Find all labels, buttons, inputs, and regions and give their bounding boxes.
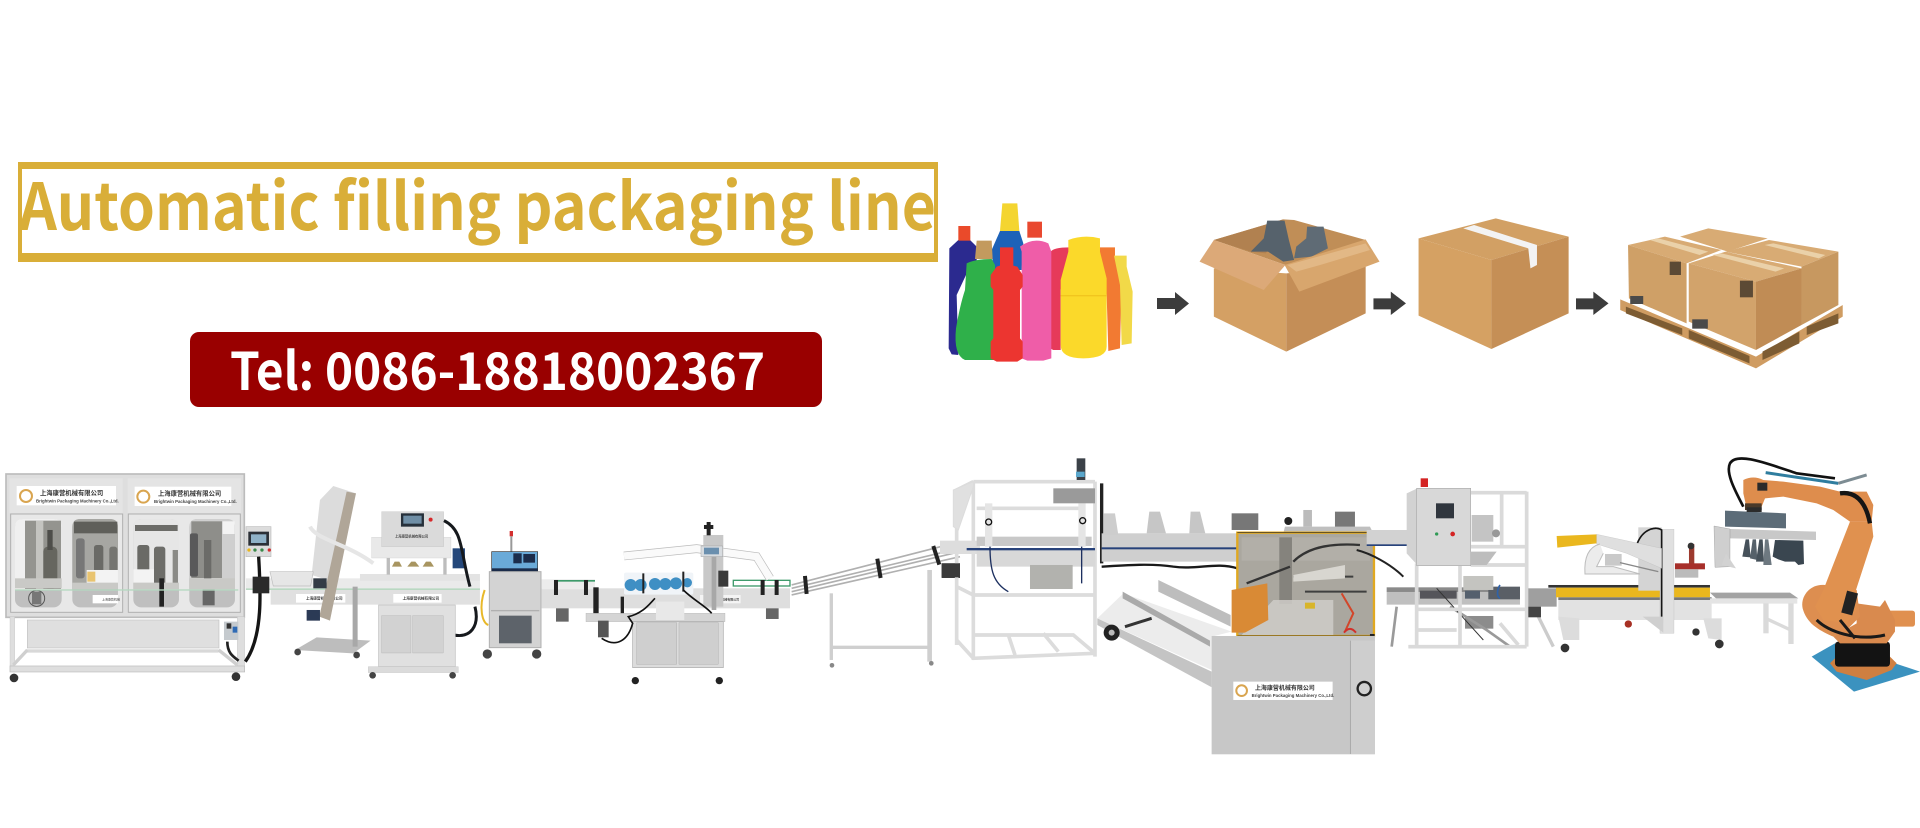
icon: cartons on pallet bbox=[1620, 228, 1843, 368]
logo plate: 上海康营机械有限公司 bbox=[1255, 684, 1315, 692]
arrow bbox=[1157, 292, 1189, 315]
labeling conveyor bbox=[542, 579, 790, 622]
cap elevator bbox=[270, 486, 373, 658]
icon: sealed carton bbox=[1419, 218, 1569, 349]
labeling machine bbox=[586, 522, 770, 684]
filling machine bbox=[6, 474, 271, 682]
induction sealer bbox=[482, 531, 541, 659]
telephone number: Tel: 0086-18818002367 bbox=[230, 330, 765, 405]
logo plate bbox=[17, 486, 119, 505]
orange carton bbox=[1232, 583, 1268, 633]
robot floor mat bbox=[1812, 643, 1920, 692]
carton magazine infeed bbox=[1097, 580, 1232, 687]
door window bbox=[189, 519, 235, 607]
robot pedestal bbox=[1830, 642, 1897, 680]
title text: Automatic filling packaging line bbox=[18, 155, 936, 249]
logo plate: Brightwin Packaging Machinery Co.,Ltd. bbox=[154, 499, 237, 504]
handwheel bbox=[1358, 682, 1371, 695]
bottle turning frame and case erector bbox=[940, 458, 1375, 754]
labeled bottles bbox=[624, 572, 693, 595]
icon: open carton with bottles bbox=[1200, 219, 1380, 352]
logo plate: 上海康营机械有限公司 bbox=[40, 488, 103, 497]
filling machine and capping section bbox=[6, 474, 480, 682]
door window bbox=[133, 519, 179, 607]
robot gripper bbox=[1714, 507, 1816, 568]
logo plate: Brightwin Packaging Machinery Co.,Ltd. bbox=[36, 498, 119, 503]
capping machine: 上海康营机械有限公司 bbox=[395, 534, 428, 539]
title box bbox=[18, 155, 938, 262]
case feed conveyor bbox=[1102, 512, 1238, 568]
inclined conveyor bbox=[792, 542, 960, 668]
bottle grid frame bbox=[953, 482, 1095, 660]
logo plate: 上海康营机械有限公司 bbox=[403, 596, 440, 601]
cartons and arrows bbox=[1200, 218, 1843, 368]
small transfer conveyor bbox=[1528, 588, 1557, 647]
drop chain conveyor bbox=[1387, 576, 1520, 647]
logo plate bbox=[393, 594, 442, 603]
logo plate: 上海康营机械有限公司 bbox=[306, 596, 343, 601]
roller conveyor bbox=[1710, 593, 1798, 644]
casters bbox=[10, 672, 240, 682]
logo plate bbox=[700, 595, 741, 603]
logo plate: Brightwin Packaging Machinery Co.,Ltd. bbox=[1252, 693, 1334, 698]
arrow bbox=[1373, 292, 1406, 315]
control cable bbox=[245, 557, 260, 662]
door window bbox=[15, 519, 62, 607]
icon: coloured bottles bbox=[949, 203, 1133, 362]
capping machine bbox=[360, 512, 480, 679]
palletizing robot bbox=[1714, 458, 1920, 692]
case erector bbox=[1212, 510, 1375, 754]
packer feed conveyor bbox=[1357, 530, 1417, 577]
induction sealer, labeling machine, inclined conveyor bbox=[482, 522, 960, 684]
logo plate bbox=[135, 487, 237, 506]
robot arm bbox=[1729, 458, 1915, 643]
pneumatic unit bbox=[224, 622, 239, 661]
carton sealing machine bbox=[1548, 527, 1724, 652]
main conveyor bbox=[246, 577, 480, 605]
logo plate bbox=[1233, 682, 1334, 700]
base frame bbox=[10, 617, 245, 672]
erector cabinet bbox=[1212, 636, 1375, 754]
small logo plate: 上海康营机械 bbox=[102, 596, 120, 601]
logo plate: 上海康营机械有限公司 bbox=[158, 489, 221, 498]
bottle conveyor bbox=[940, 458, 1102, 592]
logo plate: 上海康营机械有限公司 bbox=[709, 597, 739, 602]
logo plate bbox=[296, 594, 345, 603]
case packer, sealer, roller conveyor bbox=[1357, 478, 1798, 652]
door window bbox=[72, 519, 120, 607]
telephone banner bbox=[190, 330, 822, 407]
case packer frame bbox=[1408, 492, 1527, 647]
arrow bbox=[1576, 292, 1609, 315]
control panel bbox=[246, 527, 271, 557]
packer control box bbox=[1407, 478, 1500, 566]
